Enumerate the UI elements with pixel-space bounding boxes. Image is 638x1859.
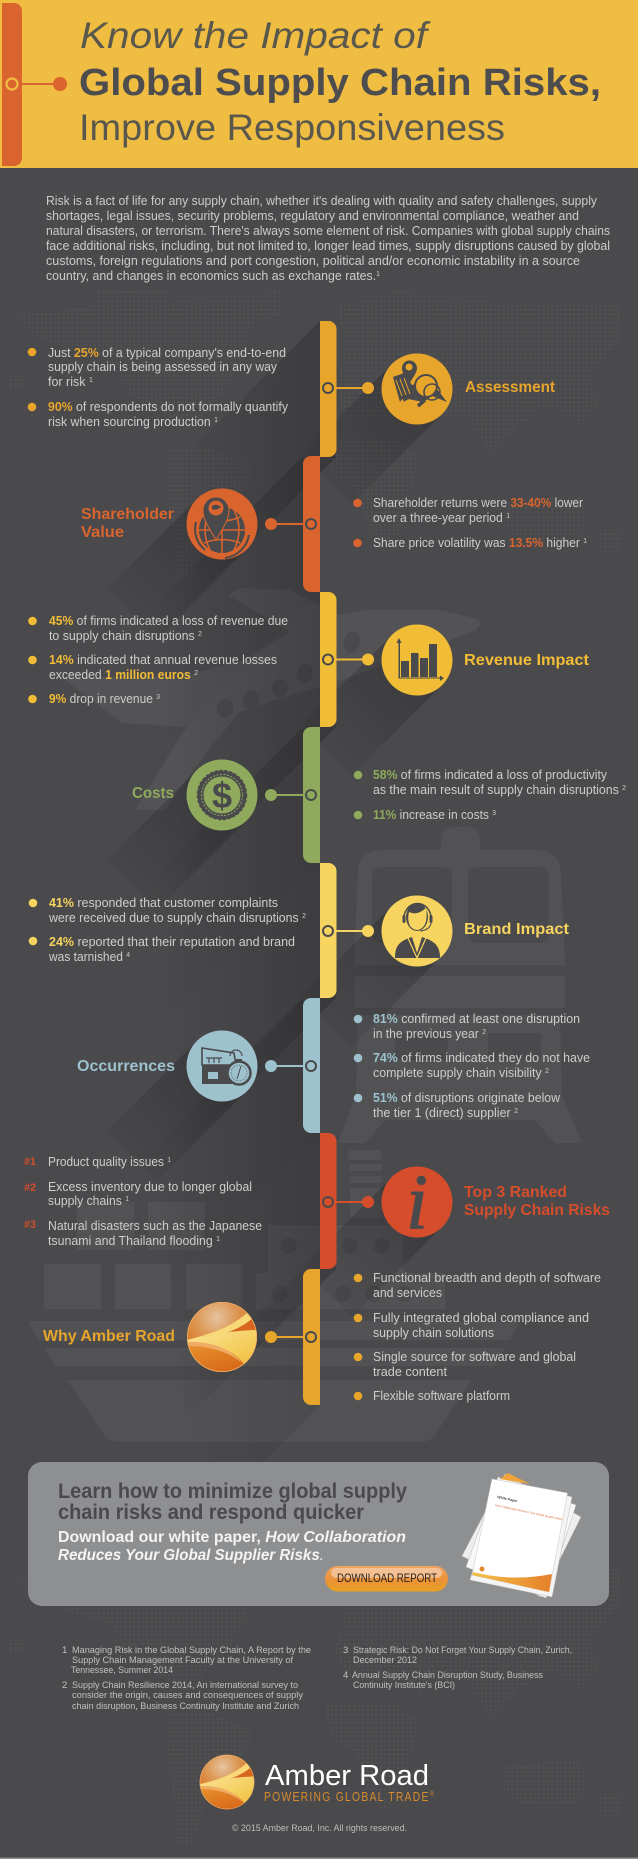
bullets: revenue impact xyxy=(28,614,288,706)
panel: top 3 ranked risks xyxy=(24,1133,610,1269)
heading: why amber road: Why Amber Road xyxy=(43,1328,175,1345)
bullets: why amber road xyxy=(354,1271,601,1403)
footnotes: December 2012 xyxy=(353,1655,417,1666)
connector: assessment xyxy=(323,382,374,394)
connector: why amber road xyxy=(265,1331,316,1343)
logo wordmark: Amber Road xyxy=(265,1760,429,1792)
intro paragraph: customs, foreign regulations and port congestion, political and/or economic instability in a source xyxy=(46,254,580,268)
bullets: shareholder value: over a three-year period xyxy=(373,511,506,525)
connector: top 3 risks xyxy=(323,1196,374,1208)
heading: occurrences: Occurrences xyxy=(77,1058,175,1075)
connector: brand impact xyxy=(323,925,374,937)
panel: shareholder value xyxy=(81,456,587,592)
ranked list: top 3 risks xyxy=(24,1155,262,1248)
footnotes: chain disruption, Business Continuity Institute and Zurich xyxy=(72,1701,299,1712)
white paper stack: How Collaboration Reduces Your Global Supplier Risks xyxy=(495,1503,563,1521)
ranked list: top 3 risks: 1 xyxy=(216,1236,220,1243)
cta text: Download our white paper, How Collaboration xyxy=(58,1529,406,1546)
ranked list: top 3 risks: tsunami and Thailand flooding xyxy=(48,1234,215,1248)
ranked list: top 3 risks: #3 xyxy=(24,1219,36,1231)
bullets: occurrences xyxy=(354,1012,590,1120)
ranked list: top 3 risks: 1 xyxy=(125,1196,129,1203)
icon: amber road sphere xyxy=(186,1302,259,1374)
bullets: why amber road: Single source for software and global xyxy=(373,1350,576,1364)
timeline segment: brand impact xyxy=(320,863,336,998)
icon: globe with location pin xyxy=(186,488,258,560)
bullets: occurrences: in the previous year xyxy=(373,1027,482,1041)
heading: brand impact: Brand Impact xyxy=(464,921,569,938)
download button: DOWNLOAD REPORT xyxy=(337,1571,438,1585)
panel: revenue impact xyxy=(28,592,589,727)
amber road logo xyxy=(199,1755,435,1811)
bullets: why amber road: Fully integrated global compliance and xyxy=(373,1311,589,1325)
ranked list: top 3 risks: Product quality issues xyxy=(48,1155,170,1169)
footnotes xyxy=(62,1645,572,1712)
ranked list: top 3 risks: #2 xyxy=(24,1182,36,1194)
timeline segment: why amber road xyxy=(303,1269,320,1405)
cta heading xyxy=(58,1480,407,1524)
connector: occurrences xyxy=(265,1060,316,1072)
cta text: Reduces Your Global Supplier Risks. xyxy=(58,1547,324,1564)
bullets: occurrences: 51% of disruptions originate below xyxy=(373,1091,561,1105)
cta text xyxy=(58,1529,406,1564)
bullets: occurrences: the tier 1 (direct) supplier xyxy=(373,1106,511,1120)
world map dot pattern, upper xyxy=(8,290,622,582)
bullets: shareholder value: Shareholder returns were 33-40% lower xyxy=(373,496,583,510)
heading: shareholder value: Shareholder xyxy=(81,506,174,523)
heading: shareholder value: Value xyxy=(81,524,124,541)
bullets: costs xyxy=(354,768,626,822)
white paper stack: White Paper xyxy=(497,1495,519,1503)
footnotes: 1 xyxy=(62,1645,67,1656)
bullets: revenue impact: 45% of firms indicated a loss of revenue due xyxy=(49,614,288,628)
bullets: why amber road: supply chain solutions xyxy=(373,1326,494,1340)
intro paragraph: shortages, legal issues, security problems, regulatory and environmental compliance, weather and xyxy=(46,209,579,223)
heading: top 3 risks xyxy=(464,1184,610,1219)
ranked list: top 3 risks: #1 xyxy=(24,1156,36,1168)
connector: revenue impact xyxy=(323,654,374,666)
bullets: revenue impact: exceeded 1 million euros xyxy=(49,668,193,682)
logo tagline: ® xyxy=(430,1790,435,1798)
heading: top 3 risks: Supply Chain Risks xyxy=(464,1202,610,1219)
bullets: assessment: 1 xyxy=(214,417,218,424)
train silhouette xyxy=(338,827,582,1143)
title line 2: Global Supply Chain Risks, xyxy=(79,62,601,104)
footnotes: Supply Chain Management Faculty at the University of xyxy=(72,1655,293,1666)
bullets: assessment: 90% of respondents do not formally quantify xyxy=(48,400,289,414)
cta heading: Learn how to minimize global supply xyxy=(58,1480,407,1503)
ranked list: top 3 risks: Natural disasters such as the Japanese xyxy=(48,1219,262,1233)
bullets: revenue impact: 2 xyxy=(194,670,198,677)
bullets: why amber road: Functional breadth and depth of software xyxy=(373,1271,601,1285)
bullets: costs: 58% of firms indicated a loss of productivity xyxy=(373,768,608,782)
footnotes: 4 xyxy=(343,1670,349,1681)
icon: dollar coin: $ xyxy=(212,775,232,816)
footnotes: 3 xyxy=(343,1645,348,1656)
world map dot pattern, lower xyxy=(8,1554,622,1846)
bullets: brand impact: was tarnished xyxy=(49,950,126,964)
long diagonal shadows xyxy=(107,321,442,1525)
bullets: brand impact: 24% reported that their reputation and brand xyxy=(49,935,295,949)
footnotes: Annual Supply Chain Disruption Study, Business xyxy=(352,1670,543,1681)
bullets: assessment: 1 xyxy=(89,377,93,384)
intro paragraph: face additional risks, including, but not limited to, longer lead times, supply disruptions caused by global xyxy=(46,239,610,253)
panel: occurrences xyxy=(77,998,590,1133)
intro paragraph: Risk is a fact of life for any supply chain, whether it's dealing with quality and safety challenges, supply xyxy=(46,194,598,208)
heading: shareholder value xyxy=(81,506,174,541)
footnotes: Managing Risk in the Global Supply Chain, A Report by the xyxy=(72,1645,311,1656)
timeline segment: occurrences xyxy=(303,998,320,1133)
footnotes: Tennessee, Summer 2014 xyxy=(71,1665,174,1676)
intro paragraph: natural disasters, or terrorism. There's always some element of risk. Companies with global supply chains xyxy=(46,224,610,238)
bullets: brand impact: 4 xyxy=(126,952,130,959)
heading: top 3 risks: Top 3 Ranked xyxy=(464,1184,567,1201)
icon: customer service agent xyxy=(382,896,452,966)
bullets: brand impact: 2 xyxy=(302,913,306,920)
bullets: costs: 11% increase in costs xyxy=(373,808,493,822)
bullets: revenue impact: 9% drop in revenue xyxy=(49,692,157,706)
bullets: why amber road: trade content xyxy=(373,1365,448,1379)
cta heading: chain risks and respond quicker xyxy=(58,1501,364,1524)
icon: information i: i xyxy=(406,1158,428,1245)
panel: costs xyxy=(132,727,626,863)
connector: costs xyxy=(265,789,316,801)
bullets: why amber road: and services xyxy=(373,1286,442,1300)
bullets: assessment xyxy=(28,346,289,429)
bullets: revenue impact: 3 xyxy=(156,694,160,701)
ship silhouette xyxy=(28,1150,520,1442)
title line 1: Know the Impact of xyxy=(80,15,431,56)
bullets: shareholder value: 1 xyxy=(583,538,587,545)
icon: dollar coin xyxy=(186,760,258,830)
bullets: costs: 3 xyxy=(492,810,496,817)
timeline segment: revenue impact xyxy=(320,592,336,727)
bullets: shareholder value xyxy=(353,496,587,550)
timeline segment: costs xyxy=(303,727,320,863)
bullets: costs: as the main result of supply chain disruptions xyxy=(373,783,622,797)
bullets: occurrences: 2 xyxy=(482,1029,486,1036)
heading: assessment: Assessment xyxy=(465,379,555,396)
connector: shareholder value xyxy=(265,518,316,530)
copyright: © 2015 Amber Road, Inc. All rights reserved. xyxy=(232,1823,407,1834)
bullets: brand impact xyxy=(29,896,306,964)
bullets: shareholder value: Share price volatility was 13.5% higher xyxy=(373,536,581,550)
bullets: occurrences: 81% confirmed at least one disruption xyxy=(373,1012,580,1026)
bullets: occurrences: 74% of firms indicated they do not have xyxy=(373,1051,590,1065)
bullets: revenue impact: 2 xyxy=(198,631,202,638)
intro paragraph: 1 xyxy=(376,271,380,278)
footnotes: Supply Chain Resilience 2014, An international survey to xyxy=(72,1680,298,1691)
header timeline tab xyxy=(2,3,67,166)
title line 3: Improve Responsiveness xyxy=(79,107,505,148)
plane silhouette xyxy=(61,588,480,810)
footnotes: Strategic Risk: Do Not Forget Your Supply Chain, Zurich, xyxy=(353,1645,572,1656)
bullets: assessment: Just 25% of a typical company's end-to-end xyxy=(48,346,286,360)
icon: map and magnifier xyxy=(382,354,452,424)
panel: why amber road xyxy=(43,1269,601,1405)
intro paragraph xyxy=(46,194,610,283)
download button xyxy=(325,1566,448,1592)
icon: bar chart xyxy=(382,624,452,696)
white paper stack xyxy=(462,1473,581,1598)
footnotes: 2 xyxy=(62,1680,67,1691)
bullets: occurrences: 2 xyxy=(545,1068,549,1075)
footnotes: consider the origin, causes and consequences of supply xyxy=(72,1690,303,1701)
bullets: occurrences: complete supply chain visibility xyxy=(373,1066,543,1080)
header band xyxy=(0,0,638,168)
panel: assessment xyxy=(28,321,555,457)
bullets: assessment: for risk xyxy=(48,375,86,389)
bullets: assessment: supply chain is being assessed in any way xyxy=(48,360,278,374)
ranked list: top 3 risks: 1 xyxy=(167,1157,171,1164)
panel: call to action xyxy=(28,1462,609,1606)
bullets: assessment: risk when sourcing production xyxy=(48,415,213,429)
intro paragraph: country, and changes in economics such as exchange rates. xyxy=(46,269,380,283)
bullets: why amber road: Flexible software platform xyxy=(373,1389,510,1403)
logo sphere xyxy=(199,1755,256,1811)
footnotes: Continuity Institute's (BCI) xyxy=(353,1680,455,1691)
logo tagline: POWERING GLOBAL TRADE xyxy=(264,1789,472,1804)
panel: brand impact xyxy=(29,863,569,998)
heading: costs: Costs xyxy=(132,785,174,802)
heading: revenue impact: Revenue Impact xyxy=(464,652,589,669)
ranked list: top 3 risks: Excess inventory due to longer global xyxy=(48,1180,252,1194)
bullets: shareholder value: 1 xyxy=(506,513,510,520)
timeline segment: assessment xyxy=(320,321,336,457)
bullets: occurrences: 2 xyxy=(514,1108,518,1115)
icon: parcel and stopwatch xyxy=(186,1030,258,1102)
timeline segment: top 3 risks xyxy=(320,1133,336,1269)
timeline segment: shareholder value xyxy=(303,456,320,592)
icon: information i xyxy=(382,1158,452,1245)
bullets: brand impact: 41% responded that customer complaints xyxy=(49,896,278,910)
bullets: revenue impact: to supply chain disruptions xyxy=(49,629,196,643)
ranked list: top 3 risks: supply chains xyxy=(48,1194,124,1208)
bullets: brand impact: were received due to supply chain disruptions xyxy=(49,911,302,925)
bullets: revenue impact: 14% indicated that annual revenue losses xyxy=(49,653,277,667)
bullets: costs: 2 xyxy=(622,785,626,792)
